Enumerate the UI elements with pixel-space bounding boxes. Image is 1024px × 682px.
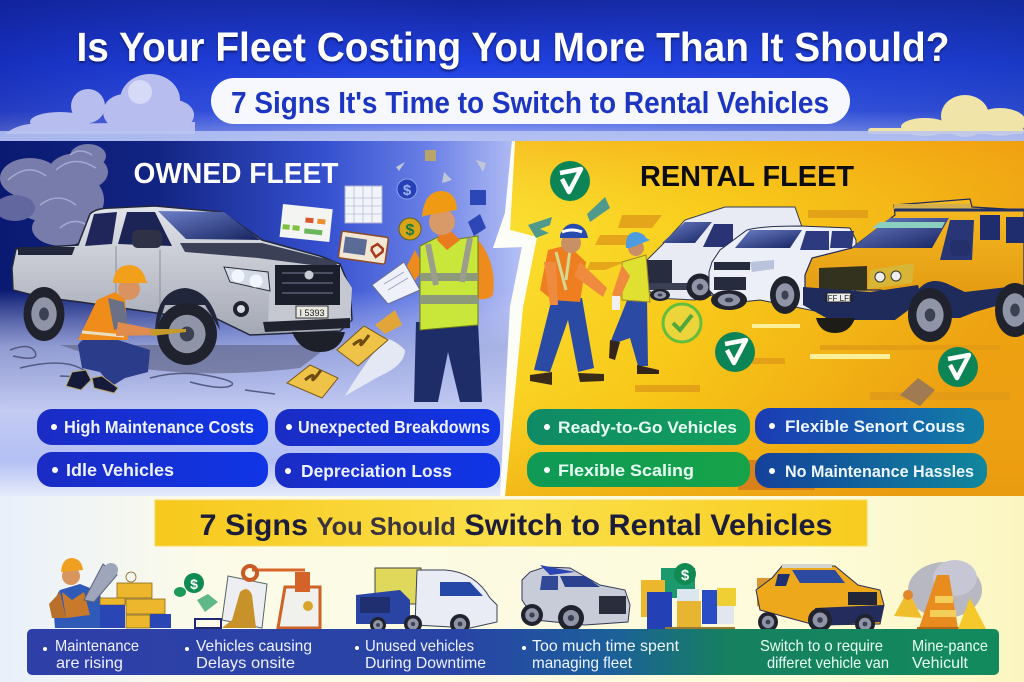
heading: owned fleet: OWNED FLEET: [134, 158, 339, 190]
caption 2: Vehicles causing: [196, 638, 312, 655]
caption 6: Mine-pance: [912, 638, 988, 655]
icon: white pickup truck: I 5393: [299, 308, 325, 318]
caption 6: Vehicult: [912, 655, 969, 672]
pill: depreciation loss: Depreciation Loss: [301, 461, 452, 481]
pill: no maintenance hassles: [755, 453, 987, 488]
icon: left clouds: [5, 74, 195, 134]
icon: silver suv: [521, 565, 630, 631]
caption 4: Too much time spent: [532, 638, 680, 655]
icon: rental worker left: [530, 224, 607, 385]
pill: no maintenance hassles: No Maintenance Hassles: [785, 462, 974, 481]
pill: high maintenance costs: High Maintenance Costs: [64, 417, 254, 437]
icon: ground shadow and cables: [10, 338, 405, 396]
icon: clock check: [663, 304, 701, 342]
caption 2: [185, 638, 312, 672]
caption 5: Switch to o require: [760, 638, 883, 655]
icon: floating documents and coins: $: [403, 182, 412, 199]
caption 6: [912, 638, 988, 672]
icon: white suv: [709, 226, 856, 314]
icon: delivery truck: [356, 568, 497, 634]
caption 1: [43, 638, 139, 672]
pill: idle vehicles: Idle Vehicles: [66, 460, 174, 480]
icon: brown package: [900, 378, 935, 406]
banner: 7 signs: [155, 500, 867, 546]
panel: owned fleet: [0, 141, 522, 496]
caption 3: During Downtime: [365, 655, 486, 672]
pill: idle vehicles: [37, 452, 268, 487]
icon: right clouds: [868, 95, 1024, 137]
icon: delays clipboard: $: [190, 576, 198, 592]
caption 2: Delays onsite: [196, 655, 295, 672]
caption 1: Maintenance: [55, 638, 139, 655]
banner: 7 signs: 7 Signs You Should Switch to Rental Vehicles: [200, 509, 832, 542]
caption 4: [522, 638, 680, 672]
icon: crouching mechanic: [66, 265, 186, 393]
caption 5: differet vehicle van: [767, 655, 889, 672]
pill: unexpected breakdowns: [275, 409, 500, 446]
caption 3: [355, 638, 486, 672]
caption 1: are rising: [56, 655, 123, 672]
caption 4: managing fleet: [532, 655, 633, 672]
panel: rental fleet: [493, 141, 1024, 496]
icon: boxes with dollar: [641, 563, 736, 629]
icon: traffic cones: [894, 560, 986, 629]
pill: depreciation loss: [275, 453, 500, 488]
pill: flexible scaling: Flexible Scaling: [558, 461, 694, 480]
pill: ready-to-go vehicles: Ready-to-Go Vehicles: [558, 418, 737, 437]
pill: flexible short course: [755, 408, 984, 444]
icon: foreman with vest: [372, 191, 494, 402]
icon: floating documents and coins: $: [406, 222, 415, 239]
icon: smoke cloud: [0, 144, 108, 246]
subtitle pill: 7 Signs It's Time to Switch to Rental Vehicles: [231, 85, 829, 120]
pill: unexpected breakdowns: Unexpected Breakdowns: [298, 417, 490, 437]
icon: floating documents and coins: [280, 150, 486, 264]
header banner: [0, 0, 1024, 142]
icon: white pickup truck: [12, 206, 352, 365]
pill: ready-to-go vehicles: [527, 409, 750, 445]
icon: green arrows: [528, 197, 610, 238]
icon: yellow suv: [803, 199, 1024, 342]
icon: check badge: [938, 347, 978, 387]
heading: rental fleet: RENTAL FLEET: [640, 161, 854, 193]
title: Is Your Fleet Costing You More Than It Should?: [76, 24, 950, 70]
icon: rental worker right: [609, 232, 659, 374]
icon: yellow pickup: [756, 564, 884, 634]
pill: high maintenance costs: [37, 409, 268, 445]
icon: mechanic with wrench and boxes: [49, 558, 171, 628]
icon: check badge: [715, 332, 755, 372]
caption 3: Unused vehicles: [365, 638, 474, 655]
pill: flexible short course: Flexible Senort Couss: [785, 417, 965, 436]
icon: hazard packages: [287, 310, 402, 398]
icon: white van: [645, 207, 802, 301]
icon: delays clipboard: [174, 566, 320, 628]
bar: signs captions: [27, 629, 999, 675]
icon: yellow suv: 3FF LFD: [823, 294, 855, 303]
icon: boxes with dollar: $: [681, 567, 690, 584]
pill: flexible scaling: [527, 452, 750, 487]
decorative road streaks: [587, 210, 1010, 490]
icon: check badge: [550, 161, 590, 201]
caption 5: [760, 638, 889, 672]
